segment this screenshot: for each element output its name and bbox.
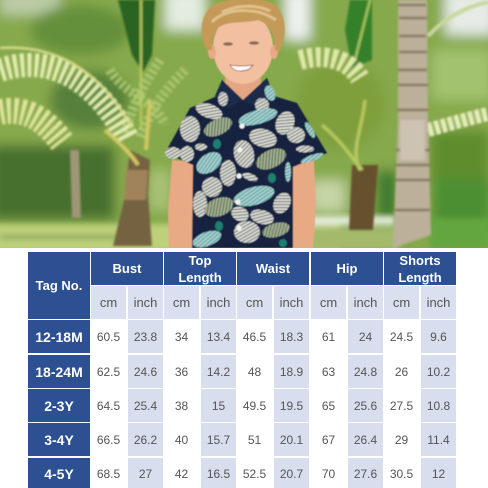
ground: [0, 216, 488, 252]
row: 3-4Y: 66.5: [97, 432, 120, 446]
row: 2-3Y: 49.5: [243, 398, 266, 412]
row: 4-5Y: 70: [322, 467, 335, 481]
row: 18-24M: 10.2: [427, 364, 450, 378]
unit row: inch: [427, 295, 450, 310]
row: 2-3Y: 19.5: [280, 398, 303, 412]
row: 3-4Y: 15.7: [207, 432, 230, 446]
row: 12-18M: 34: [175, 330, 188, 344]
row: 2-3Y: 10.8: [427, 398, 450, 412]
row: 3-4Y: 51: [248, 432, 261, 446]
row: 3-4Y: [28, 423, 456, 456]
tag number header: Tag No.: [36, 278, 82, 293]
row: 2-3Y: 38: [175, 398, 188, 412]
header: waist: [237, 252, 309, 285]
row: 3-4Y: 26.4: [354, 432, 377, 446]
header: waist: Waist: [256, 261, 290, 276]
row: 3-4Y: 40: [175, 432, 188, 446]
tag number header: [28, 252, 90, 319]
row: 12-18M: 23.8: [134, 330, 157, 344]
row: 2-3Y: 2-3Y: [44, 398, 74, 414]
shirt: [165, 78, 327, 251]
unit row: inch: [280, 295, 303, 310]
row: 4-5Y: 4-5Y: [44, 466, 74, 482]
row: 2-3Y: 65: [322, 398, 335, 412]
row: 4-5Y: 27: [139, 467, 152, 481]
neck and head: [202, 0, 285, 102]
header: bust: Bust: [113, 261, 141, 276]
header: shorts length: Shorts: [399, 252, 441, 268]
row: 18-24M: 24.6: [134, 364, 157, 378]
header: hip: Hip: [337, 261, 357, 276]
row: 3-4Y: 20.1: [280, 432, 303, 446]
unit row: [91, 286, 456, 319]
row: 18-24M: 14.2: [207, 364, 230, 378]
row: 4-5Y: 52.5: [243, 467, 266, 481]
row: 12-18M: 24.5: [390, 330, 413, 344]
row: 3-4Y: 67: [322, 432, 335, 446]
row: 3-4Y: 11.4: [427, 432, 450, 446]
header: top length: [164, 252, 236, 285]
row: 4-5Y: 27.6: [354, 467, 377, 481]
palm trunks and fronds: [0, 0, 488, 248]
row: 18-24M: 62.5: [97, 364, 120, 378]
header: top length: Length: [178, 270, 222, 284]
row: 4-5Y: 42: [175, 467, 188, 481]
boy: [165, 0, 327, 251]
row: 12-18M: 60.5: [97, 330, 120, 344]
unit row: inch: [354, 295, 377, 310]
header: hip: [311, 252, 383, 285]
row: 2-3Y: [28, 389, 456, 422]
header: top length: Top: [189, 252, 211, 268]
unit row: cm: [173, 295, 190, 310]
row: 3-4Y: 26.2: [134, 432, 157, 446]
row: 18-24M: 36: [175, 364, 188, 378]
row: 2-3Y: 27.5: [390, 398, 413, 412]
row: 4-5Y: [28, 458, 456, 488]
size table: [28, 252, 456, 488]
row: 4-5Y: 68.5: [97, 467, 120, 481]
row: 12-18M: 9.6: [430, 330, 447, 344]
row: 18-24M: 18-24M: [35, 364, 83, 380]
row: 12-18M: 24: [359, 330, 372, 344]
unit row: inch: [207, 295, 230, 310]
row: 12-18M: 13.4: [207, 330, 230, 344]
row: 4-5Y: 30.5: [390, 467, 413, 481]
row: 4-5Y: 12: [432, 467, 445, 481]
arms: [168, 160, 316, 248]
row: 3-4Y: 3-4Y: [44, 432, 74, 448]
header: shorts length: Length: [398, 270, 442, 284]
row: 4-5Y: 20.7: [280, 467, 303, 481]
unit row: inch: [134, 295, 157, 310]
row: 4-5Y: 16.5: [207, 467, 230, 481]
row: 2-3Y: 64.5: [97, 398, 120, 412]
row: 12-18M: 61: [322, 330, 335, 344]
row: 3-4Y: 29: [395, 432, 408, 446]
row: 12-18M: 46.5: [243, 330, 266, 344]
row: 18-24M: 48: [248, 364, 261, 378]
row: 18-24M: [28, 355, 456, 388]
row: 18-24M: 63: [322, 364, 335, 378]
row: 12-18M: 12-18M: [35, 328, 83, 344]
unit row: cm: [320, 295, 337, 310]
unit row: cm: [393, 295, 410, 310]
row: 18-24M: 24.8: [354, 364, 377, 378]
unit row: cm: [100, 295, 117, 310]
header: shorts length: [384, 252, 456, 285]
row: 2-3Y: 25.4: [134, 398, 157, 412]
row: 2-3Y: 15: [212, 398, 225, 412]
row: 12-18M: 18.3: [280, 330, 303, 344]
row: 18-24M: 26: [395, 364, 408, 378]
row: 12-18M: [28, 320, 456, 353]
row: 18-24M: 18.9: [280, 364, 303, 378]
unit row: cm: [246, 295, 263, 310]
background foliage: [0, 0, 488, 270]
photo: boy in palm shirt among palm trees: [0, 0, 488, 248]
row: 2-3Y: 25.6: [354, 398, 377, 412]
header: bust: [91, 252, 163, 285]
